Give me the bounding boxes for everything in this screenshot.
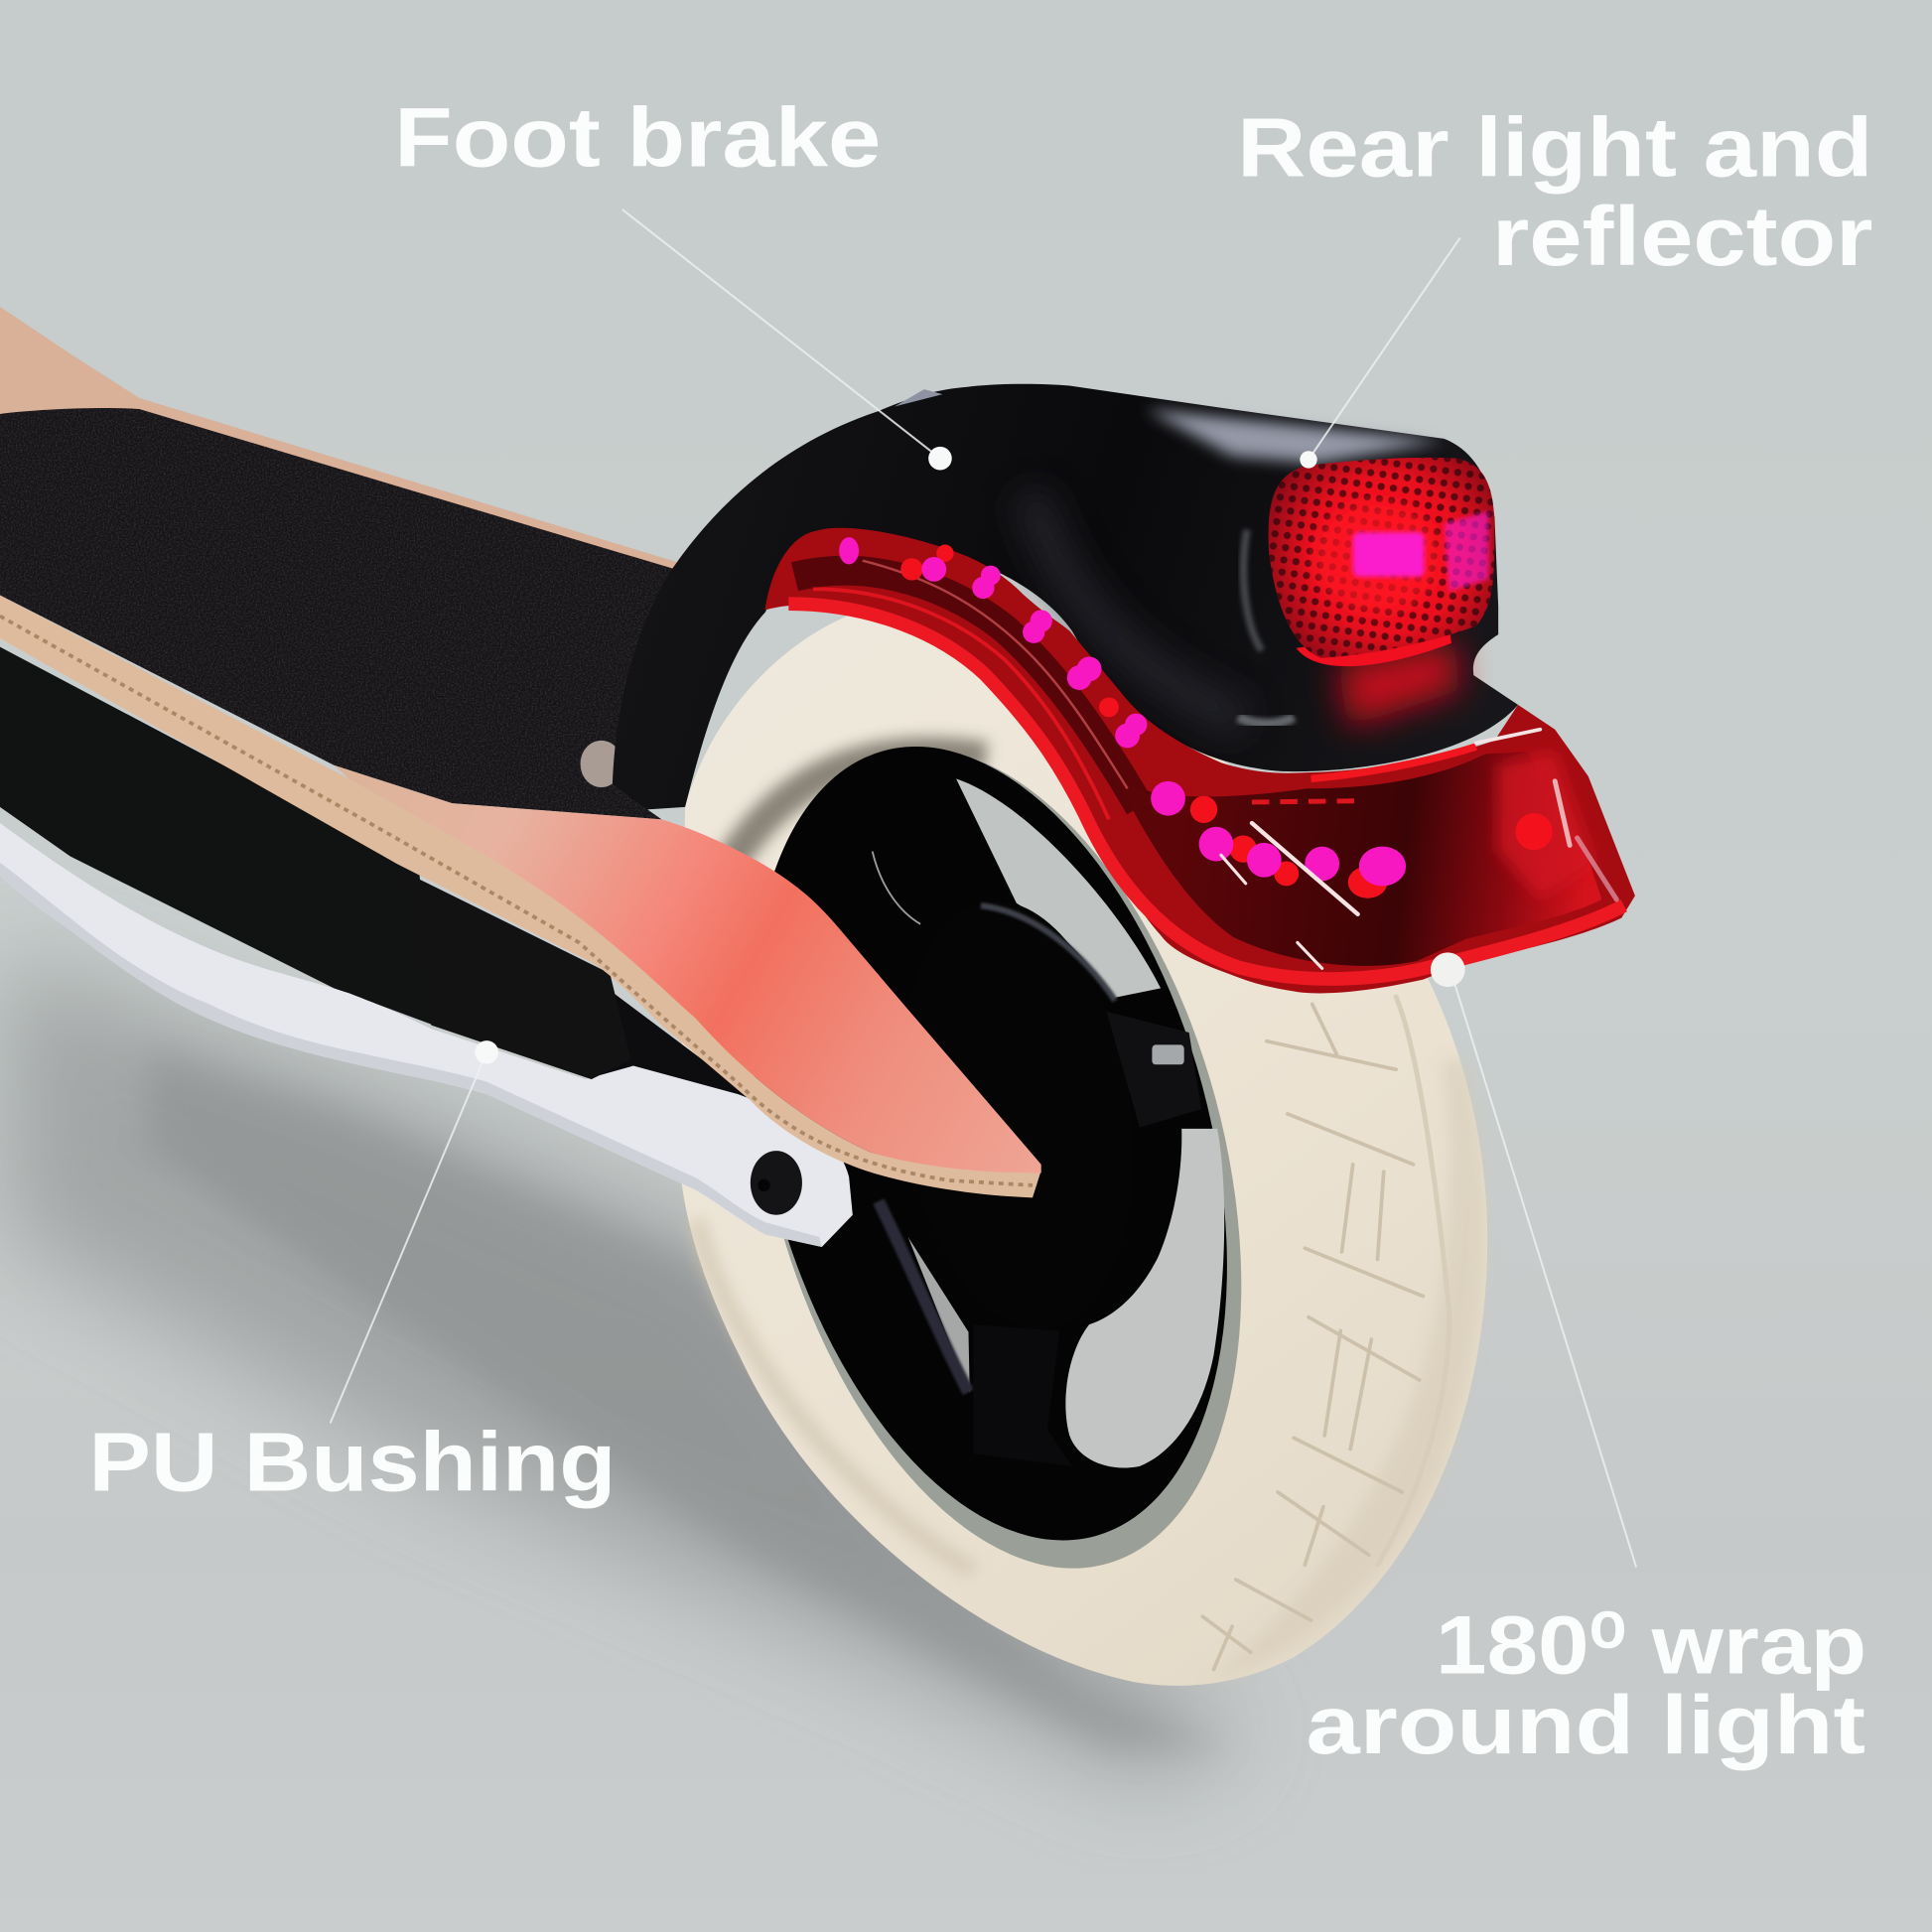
reflector prism pattern [1269, 458, 1494, 658]
reflector magenta side [1445, 511, 1488, 592]
marker dot [1431, 952, 1465, 987]
lower lens interior [1115, 752, 1601, 966]
reflector body [1269, 458, 1494, 658]
label: reflector [1492, 190, 1872, 283]
white glints [1221, 730, 1616, 968]
wrap around light [765, 528, 1635, 993]
plywood layers [0, 617, 1033, 1185]
wheel opening [671, 694, 1308, 1593]
callout: wrap around light [1307, 952, 1866, 1771]
label [1307, 1598, 1866, 1771]
fender lower highlight [1238, 717, 1294, 724]
label: Rear light and [1237, 100, 1872, 194]
hub [876, 886, 1160, 1344]
label: Foot brake [394, 91, 881, 185]
pivot bolt [751, 1151, 802, 1215]
label: PU Bushing [88, 1416, 617, 1509]
tire [680, 609, 1487, 1686]
marker dot [1300, 451, 1317, 469]
callout: rear light and reflector [1237, 100, 1872, 469]
white swing arm [0, 823, 853, 1247]
lower spokes [973, 1324, 1072, 1466]
leader line [1451, 973, 1636, 1568]
fender top highlight [1146, 409, 1445, 464]
hub detail line [873, 852, 920, 924]
tire sidewall shade [696, 1220, 973, 1571]
rim ring [669, 694, 1324, 1622]
marker dot [475, 1040, 498, 1064]
inner top tire shadow [727, 754, 986, 869]
spoke highlight [879, 1201, 968, 1392]
foot brake fender [613, 384, 1518, 809]
label: 180⁰ wrap [1436, 1598, 1866, 1691]
silver fender mount [581, 741, 622, 787]
top vents [895, 389, 942, 407]
axle bolt [1152, 1044, 1184, 1064]
upper deck wood [0, 307, 680, 579]
tire outer shade [1207, 1059, 1486, 1683]
reflector lower lip [1297, 625, 1451, 666]
light band body [765, 528, 1635, 993]
rear foot plate wood [334, 765, 1041, 1173]
leader line [622, 209, 940, 459]
callout: foot brake [394, 91, 952, 470]
upper band dark core [794, 571, 1140, 807]
callout: PU bushing [88, 1040, 617, 1509]
small floor gap by spoke [908, 1237, 970, 1392]
fender inner fold [1029, 492, 1244, 721]
label: around light [1307, 1679, 1865, 1771]
fender vertical highlight [1244, 530, 1262, 650]
reflector glow [1337, 640, 1460, 727]
floor seen through lower wheel gap [1065, 1129, 1224, 1467]
deck underside battery [0, 647, 434, 1026]
dark frame between box and swing arm [579, 967, 850, 1171]
hub rim highlight [981, 905, 1115, 1001]
pink leds [839, 537, 1406, 886]
wood deck edge [0, 595, 1041, 1197]
axle bracket [1106, 1012, 1201, 1128]
grip tape [0, 408, 675, 819]
controller box [400, 870, 630, 1079]
leader line [1309, 238, 1460, 460]
red leds [900, 545, 1553, 898]
arm lower shading [0, 863, 822, 1247]
marker dot [928, 447, 952, 470]
floor shadow [0, 949, 1244, 1780]
floor seen through upper wheel gap [956, 778, 1161, 998]
right lens glow [1497, 752, 1595, 899]
leader line [331, 1052, 486, 1423]
tread marks [1202, 997, 1449, 1670]
reflector center light [1353, 532, 1425, 577]
band streaks [788, 561, 1624, 979]
rear reflector [1269, 458, 1494, 727]
rear wheel [669, 609, 1487, 1686]
reflector bright area [1313, 500, 1442, 614]
label [1237, 100, 1872, 283]
